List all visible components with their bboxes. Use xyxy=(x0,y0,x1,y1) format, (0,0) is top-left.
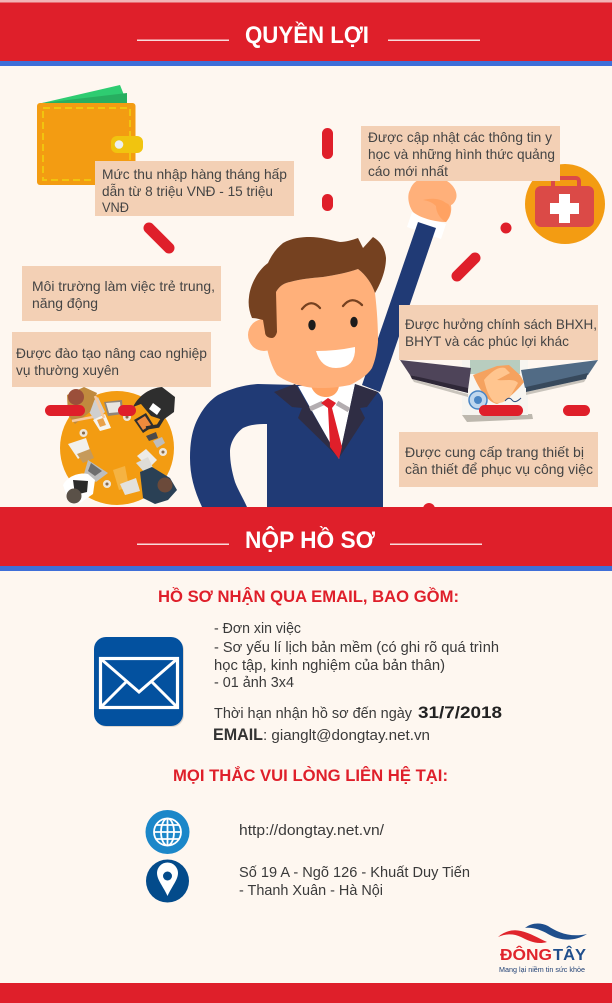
icon: globe xyxy=(146,810,190,854)
red dashes over illustrations xyxy=(45,405,590,416)
text: deadline: Thời hạn nhận hồ sơ đến ngày xyxy=(214,706,413,722)
raised arm xyxy=(362,222,436,392)
illustration: handshake with document xyxy=(400,360,598,422)
logo: dong tay: TÂY xyxy=(553,945,586,964)
tie xyxy=(321,398,342,459)
callout: updates: cáo mới nhất xyxy=(368,163,448,179)
logo: dong tay: Mang lại niềm tin sức khỏe xyxy=(499,965,585,974)
illustration: team meeting table xyxy=(60,387,177,505)
text: address: - Thanh Xuân - Hà Nội xyxy=(239,883,383,899)
ear xyxy=(248,319,280,351)
header band: quyền lợi xyxy=(0,0,612,66)
callout: updates xyxy=(361,126,560,181)
text: deadline: 31/7/2018 xyxy=(418,704,502,722)
text: address xyxy=(239,865,470,899)
people xyxy=(63,387,177,504)
hair xyxy=(249,237,386,338)
heading: contact: MỌI THẮC VUI LÒNG LIÊN HỆ TẠI: xyxy=(173,766,448,785)
text block: documents: - 01 ảnh 3x4 xyxy=(214,675,294,691)
shirt cuff xyxy=(407,212,446,239)
cups xyxy=(81,414,166,487)
text: address: Số 19 A - Ngõ 126 - Khuất Duy Tiến xyxy=(239,865,470,881)
callout: training: Được đào tạo nâng cao nghiệp xyxy=(16,345,207,361)
callout: income: dẫn từ 8 triệu VNĐ - 15 triệu xyxy=(102,183,273,199)
callout: equipment xyxy=(399,432,598,487)
footer band xyxy=(0,983,612,1003)
header band: quyền lợi: QUYỀN LỢI xyxy=(245,21,369,49)
text block: documents xyxy=(214,621,499,691)
callout: income: Mức thu nhập hàng tháng hấp xyxy=(102,166,287,182)
smile xyxy=(316,347,355,368)
heading: email: HỒ SƠ NHẬN QUA EMAIL, BAO GỒM: xyxy=(158,587,459,606)
text: email: : gianglt@dongtay.net.vn xyxy=(263,728,430,744)
brows xyxy=(302,300,362,309)
callout: training: vụ thường xuyên xyxy=(16,362,119,378)
papers and devices xyxy=(68,397,165,495)
text block: documents: - Sơ yếu lí lịch bản mềm (có ghi rõ quá trình xyxy=(214,640,499,656)
icon: map pin xyxy=(146,860,189,902)
illustration: businessman xyxy=(190,178,457,507)
neck xyxy=(311,382,339,397)
callout: environment: Môi trường làm việc trẻ trung, xyxy=(32,278,215,294)
callout: income xyxy=(95,161,294,216)
face xyxy=(267,269,378,388)
callout: environment: năng động xyxy=(32,295,98,311)
callout: equipment: Được cung cấp trang thiết bị xyxy=(405,444,584,460)
suit torso xyxy=(190,384,383,507)
eyes xyxy=(308,320,316,330)
text: website: http://dongtay.net.vn/ xyxy=(239,823,385,839)
icon: wallet xyxy=(37,85,143,185)
callout: updates: Được cập nhật các thông tin y xyxy=(368,129,552,145)
text: deadline xyxy=(214,704,502,722)
callout: insurance: Được hưởng chính sách BHXH, xyxy=(405,316,597,332)
icon: envelope xyxy=(94,637,184,727)
text block: documents: học tập, kinh nghiệm của bản thân) xyxy=(214,658,445,674)
callout: insurance: BHYT và các phúc lợi khác xyxy=(405,333,569,349)
callout: updates: học và những hình thức quảng xyxy=(368,146,555,162)
header band: nộp hồ sơ: NỘP HỒ SƠ xyxy=(245,526,375,554)
text block: documents: - Đơn xin việc xyxy=(214,621,301,637)
shirt xyxy=(298,384,355,459)
collar xyxy=(310,403,349,410)
callout: training xyxy=(12,332,211,387)
text: email: EMAIL xyxy=(213,726,263,744)
callout: insurance xyxy=(399,305,598,360)
callout: income: VNĐ xyxy=(102,199,129,215)
icon: medical kit xyxy=(525,164,605,244)
logo: dong tay: ĐÔNG xyxy=(500,945,552,964)
lapels xyxy=(274,384,339,458)
fist xyxy=(408,178,457,222)
callout: equipment: cần thiết để phục vụ công việc xyxy=(405,461,593,477)
text: email xyxy=(213,726,430,744)
header band: nộp hồ sơ xyxy=(0,507,612,571)
logo: dong tay xyxy=(498,924,587,974)
decorative red dashes and dots xyxy=(149,128,512,515)
callout: environment xyxy=(22,266,221,321)
